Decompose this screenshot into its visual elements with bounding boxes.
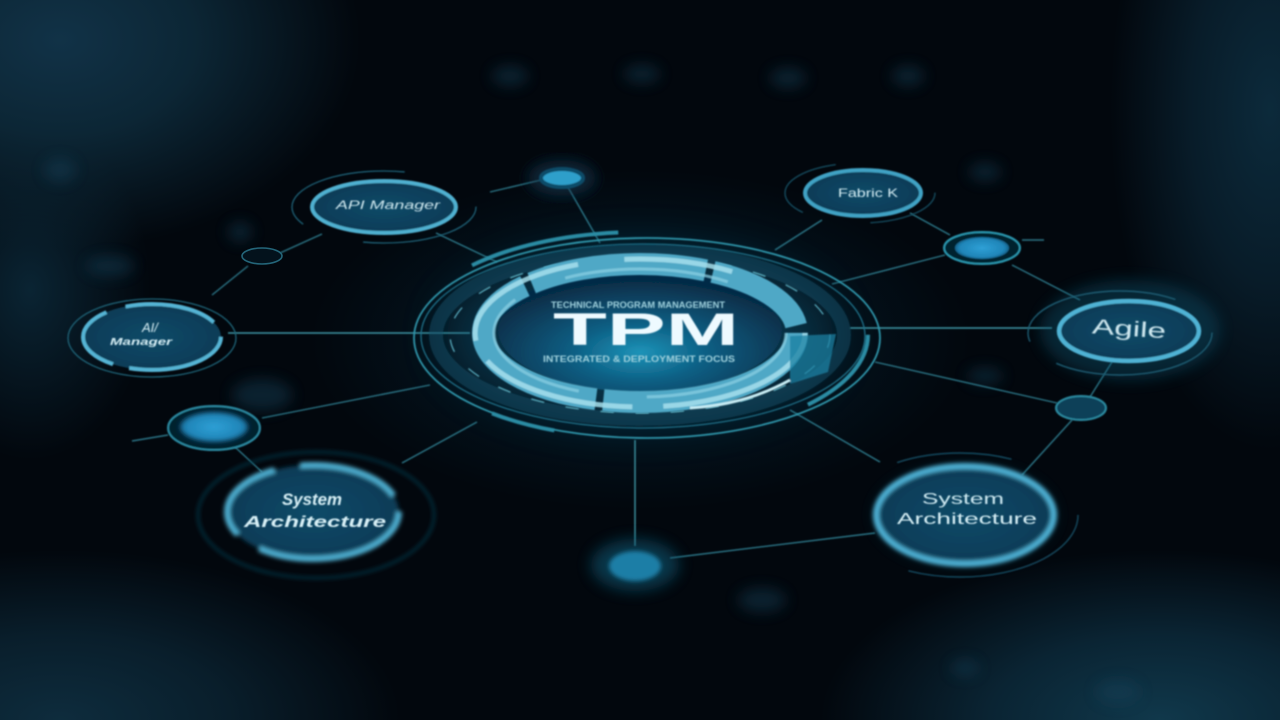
node: blue top right bbox=[944, 232, 1020, 264]
hub caption bottom: INTEGRATED & DEPLOYMENT FOCUS bbox=[543, 354, 735, 365]
node: small top hub bbox=[528, 160, 596, 196]
hub caption top: TECHNICAL PROGRAM MANAGEMENT bbox=[551, 300, 726, 310]
node: blue left bbox=[168, 406, 260, 450]
node: System Architecture left: Architecture bbox=[242, 514, 386, 531]
node: System Architecture right: Architecture bbox=[897, 511, 1037, 528]
hub bright ring bbox=[475, 259, 836, 408]
node: Fabric K bbox=[785, 163, 935, 223]
node: System Architecture left: System bbox=[282, 490, 342, 509]
node: System Architecture left bbox=[198, 452, 434, 578]
node: API Manager bbox=[292, 171, 476, 243]
hub disc bbox=[498, 268, 782, 392]
hub glow bbox=[445, 249, 835, 421]
node: System Architecture right bbox=[842, 453, 1078, 577]
node: AI Manager: Manager bbox=[110, 336, 173, 348]
node: Fabric K: Fabric K bbox=[838, 186, 898, 200]
node: AI Manager: AI/ bbox=[141, 320, 159, 335]
node: System Architecture right: System bbox=[922, 491, 1004, 508]
node: small dark right bbox=[1056, 396, 1106, 420]
node: Agile bbox=[1028, 280, 1220, 380]
bokeh spots bbox=[44, 65, 1140, 704]
hub title: TPM bbox=[553, 304, 739, 355]
node: Agile: Agile bbox=[1091, 315, 1167, 343]
hub outer rings bbox=[412, 232, 880, 438]
node: API Manager: API Manager bbox=[335, 198, 441, 212]
node: bottom glow bbox=[591, 539, 679, 591]
connector lines bbox=[132, 180, 1112, 558]
node: open small ring bbox=[242, 248, 282, 264]
central hub: TPM bbox=[412, 232, 880, 438]
node: AI Manager bbox=[68, 299, 236, 377]
